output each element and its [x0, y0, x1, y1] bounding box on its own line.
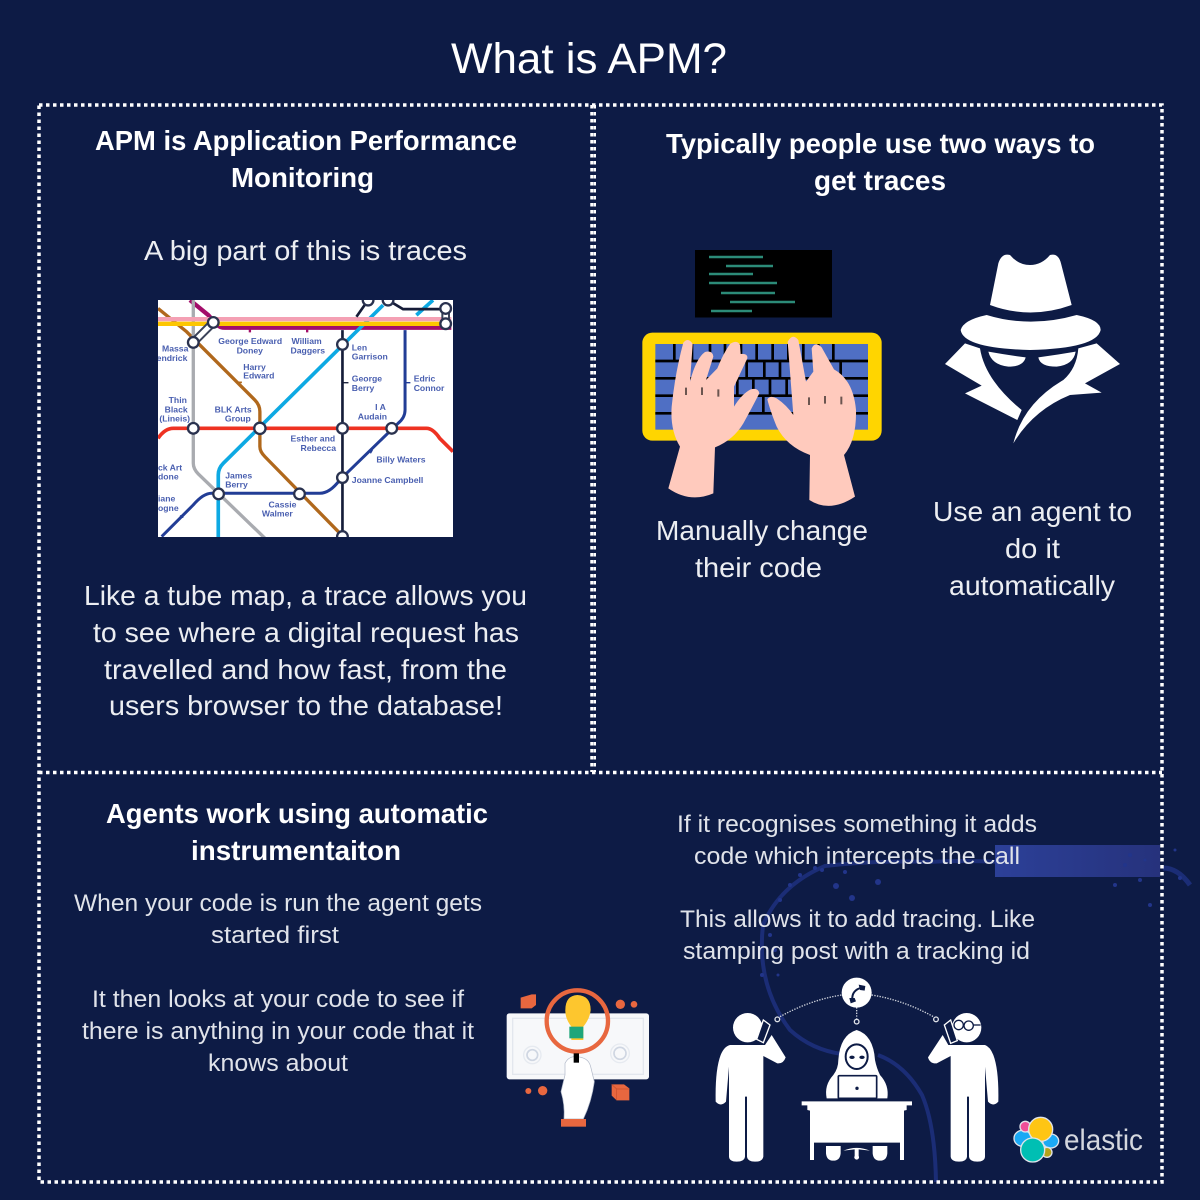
chart: tube map: endrick	[157, 353, 188, 363]
chart: tube map: Black	[165, 404, 188, 414]
chart: tube map: Edric	[414, 374, 436, 384]
icon: phone call interception	[716, 978, 998, 1162]
text block: intercept the call: code which intercepts the call	[694, 843, 1020, 870]
heading: agents: instrumentaiton	[191, 835, 401, 866]
heading: APM definition	[95, 125, 517, 193]
icon: hands on keyboard	[642, 333, 882, 506]
text block: agent starts first: started first	[211, 922, 339, 949]
text block: agent looks at code: knows about	[208, 1050, 348, 1077]
chart: tube map: Edward	[243, 371, 274, 381]
caption: use an agent	[933, 496, 1132, 601]
caption: use an agent: automatically	[949, 570, 1115, 601]
chart: tube map: Esther and	[291, 434, 335, 444]
chart: tube map: James	[225, 470, 252, 480]
text block: tube map analogy: users browser to the database!	[109, 690, 503, 721]
panel: two ways to get traces	[642, 128, 1132, 601]
heading: two ways	[666, 128, 1095, 196]
logo mark	[1014, 1117, 1059, 1162]
figure: left person	[716, 1013, 786, 1162]
icon: spy agent	[945, 255, 1120, 443]
chart: tube map: iane	[158, 494, 175, 504]
text block: agent looks at code: It then looks at your code to see if	[92, 986, 464, 1013]
chart: tube map: Cassie	[269, 500, 297, 510]
text block: agent looks at code: there is anything in your code that it	[82, 1018, 474, 1045]
text block: tracing id: This allows it to add tracing. Like	[680, 906, 1035, 933]
heading: two ways: get traces	[814, 165, 946, 196]
chart: tube map: I A	[375, 402, 387, 412]
chart: tube map: Thin	[169, 395, 187, 405]
text block: agent looks at code	[82, 986, 474, 1077]
figure: right person with glasses	[928, 1013, 998, 1162]
chart: tube map: Berry	[225, 480, 248, 490]
chart: tube map: Group	[225, 414, 251, 424]
heading: agents	[106, 798, 488, 866]
text block: tracing id	[680, 906, 1035, 965]
chart: tube map: Connor	[414, 383, 445, 393]
background swoosh decoration	[760, 845, 1190, 1182]
text block: agent starts first: When your code is run the agent gets	[74, 890, 482, 917]
chart: tube map: Garrison	[352, 352, 388, 362]
chart: tube map: ogne	[158, 503, 179, 513]
title: What is APM?	[451, 35, 727, 83]
text block: agent starts first	[74, 890, 482, 949]
chart: tube map: Harry	[243, 362, 266, 372]
chart: tube map: George	[352, 374, 382, 384]
chart: tube map: Billy Waters	[376, 455, 426, 465]
caption: use an agent: Use an agent to	[933, 496, 1132, 527]
chart: tube map: Len	[352, 342, 367, 352]
text block: tube map analogy: Like a tube map, a trace allows you	[84, 580, 527, 611]
panel: what APM is	[84, 125, 527, 721]
subheading: traces: A big part of this is traces	[144, 235, 467, 266]
logo wordmark: elastic	[1064, 1124, 1143, 1157]
chart: tube map: Walmer	[262, 509, 293, 519]
caption: manually change code	[656, 515, 868, 583]
chart: tube map: done	[158, 471, 179, 481]
text block: tube map analogy: travelled and how fast, from the	[104, 654, 507, 685]
chart: tube map: Doney	[237, 345, 263, 355]
chart: tube map: William	[292, 336, 322, 346]
heading: APM definition: Monitoring	[231, 162, 374, 193]
chart: tube map: Daggers	[291, 345, 325, 355]
panel: automatic instrumentation	[74, 798, 1143, 1162]
chart: tube map: Massa	[162, 344, 189, 354]
chart: tube map: BLK Arts	[215, 404, 252, 414]
icon: magnifier and light bulb	[507, 990, 649, 1127]
logo: elastic	[1014, 1117, 1143, 1162]
caption: manually change code: their code	[695, 552, 822, 583]
heading: agents: Agents work using automatic	[106, 798, 488, 829]
text block: tube map analogy	[84, 580, 527, 721]
text block: intercept the call	[677, 811, 1037, 870]
caption: manually change code: Manually change	[656, 515, 868, 546]
chart: tube map: George Edward	[218, 336, 282, 346]
text block: tracing id: stamping post with a tracking id	[683, 938, 1030, 965]
chart: tube map: Audain	[358, 411, 387, 421]
text block: tube map analogy: to see where a digital request has	[93, 617, 519, 648]
chart: tube map: ck Art	[158, 462, 182, 472]
chart: tube map: Berry	[352, 383, 375, 393]
chart: tube map	[157, 295, 453, 542]
heading: APM definition: APM is Application Performance	[95, 125, 517, 156]
chart: tube map: Rebecca	[301, 443, 336, 453]
text block: intercept the call: If it recognises something it adds	[677, 811, 1037, 838]
caption: use an agent: do it	[1005, 533, 1060, 564]
heading: two ways: Typically people use two ways to	[666, 128, 1095, 159]
chart: tube map: Joanne Campbell	[352, 475, 423, 485]
chart: tube map: (Lineis)	[159, 414, 190, 424]
icon: code screen	[695, 250, 832, 318]
figure: hooded hacker at desk	[802, 1030, 912, 1161]
